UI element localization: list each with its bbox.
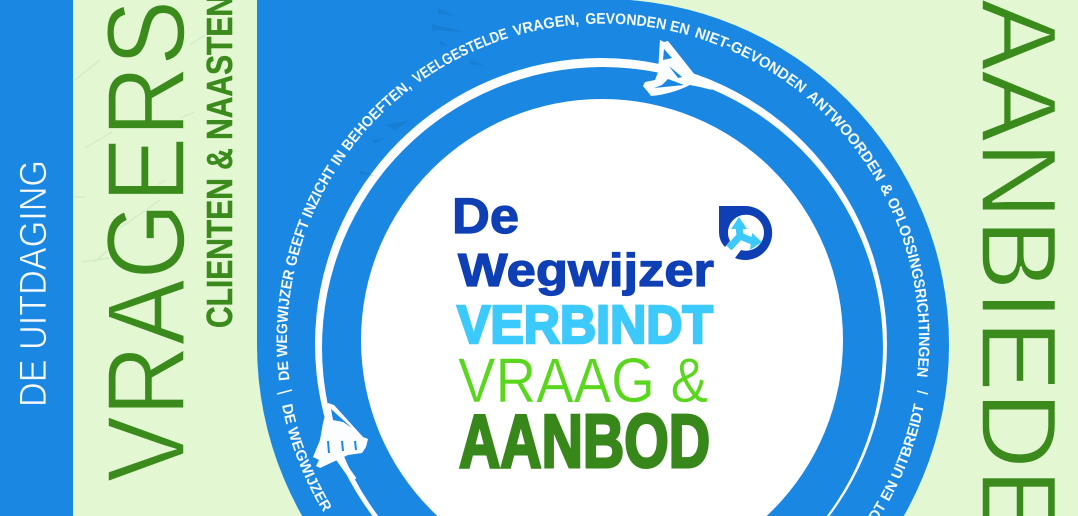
text: de uitdaging: DE UITDAGING — [13, 160, 55, 407]
circular text: top arc: OPLOSSINGSRICHTINGEN — [888, 198, 930, 377]
panel: left blue strip — [0, 0, 73, 516]
circular text: top arc: & — [880, 184, 892, 196]
inner white circle — [361, 99, 843, 516]
text: aanbod: AANBOD — [459, 399, 710, 483]
circular text: bottom arc left: DE WEGWIJZER — [282, 404, 331, 512]
text: vraag en: VRAAG & — [458, 346, 708, 416]
panel: blue circle — [257, 0, 949, 516]
white ring — [315, 58, 887, 516]
circular text: top arc: DE WEGWIJZER GEEFT INZICHT IN BEHOEFTEN, — [276, 82, 412, 380]
circular text: top arc: GEVONDEN EN — [586, 13, 690, 35]
circular text: top arc — [276, 13, 930, 380]
icon: sail top — [643, 40, 712, 96]
circular text: top arc: VRAGEN, — [512, 14, 578, 36]
icon: wegwijzer logo — [719, 206, 772, 260]
icon: sail bottom — [313, 403, 368, 480]
title: de wegwijzer — [452, 188, 714, 296]
text: wegwijzer: Wegwijzer — [458, 244, 714, 296]
circular text: top arc: VEELGESTELDE — [411, 28, 508, 82]
separator left — [277, 390, 292, 394]
text: verbindt: VERBINDT — [457, 295, 713, 355]
circular text: top arc: ANTWOORDEN — [806, 92, 886, 182]
text: de: De — [452, 188, 519, 244]
circular text: top arc: NIET-GEVONDEN — [695, 27, 807, 93]
separator right — [917, 391, 928, 394]
